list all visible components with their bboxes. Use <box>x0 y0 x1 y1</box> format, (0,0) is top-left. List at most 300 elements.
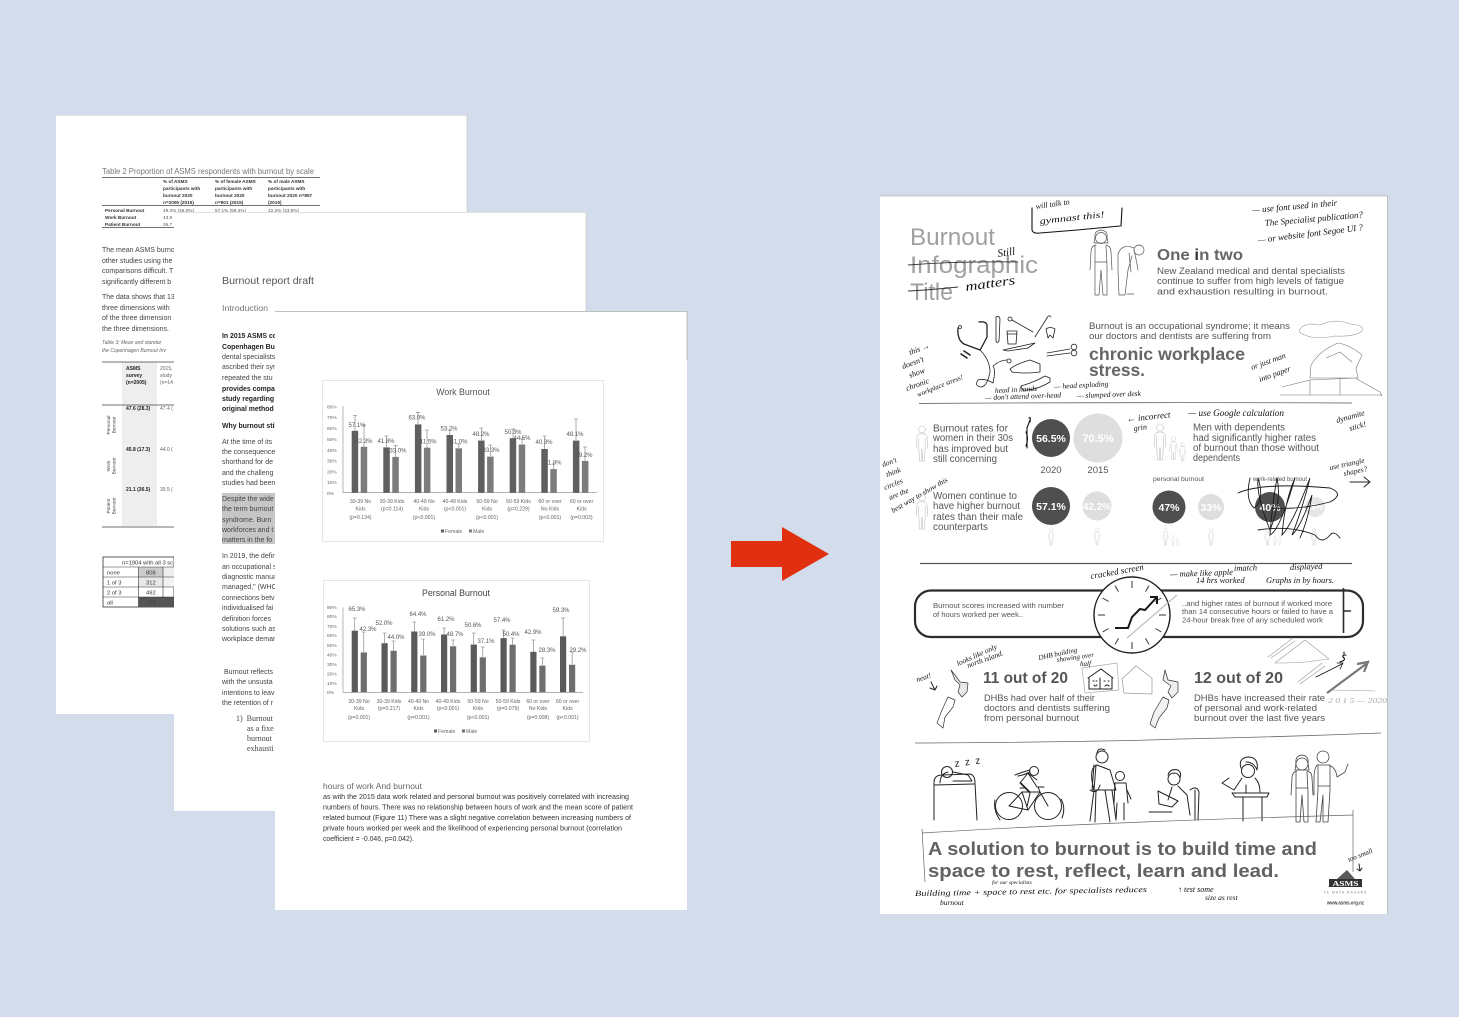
y axis: 80% <box>327 614 337 620</box>
value labels: 42.3% <box>355 439 373 445</box>
value labels: 41.0% <box>450 440 468 446</box>
icon: standing couple <box>1291 751 1348 822</box>
value labels: 59.3% <box>552 608 570 614</box>
legend <box>434 729 477 735</box>
category labels: Kids <box>413 706 424 712</box>
bar chart: personal burnout <box>324 580 590 742</box>
circle: 57.1 percent female: 57.1% <box>1036 501 1067 513</box>
table 2: burnout 2020 <box>163 193 193 198</box>
panel: draft report page 2 <box>174 212 586 811</box>
text: men with dependents <box>1193 422 1319 464</box>
value labels: 33.0% <box>389 448 407 454</box>
handwritten note: font suggestions: — or website font Segoe UI ? <box>1256 222 1364 245</box>
y axis: 0% <box>327 491 335 497</box>
value labels: 41.5% <box>419 440 437 446</box>
handwritten note: this doesn't show chronic workplace stress: workplace stress! <box>916 373 965 399</box>
value labels: 48.2% <box>472 432 490 438</box>
label: 2015 to 2020 sketch: 2 0 1 5 — 2020 <box>1328 697 1388 705</box>
logo: ASMS: TE MATA RAUARA <box>1323 890 1368 894</box>
handwritten note: font suggestions <box>1250 198 1364 245</box>
value labels: 39.0% <box>418 632 436 638</box>
body paragraphs: The data shows that 13 <box>102 294 175 301</box>
handwritten note: test some size as rest <box>1178 885 1239 902</box>
handwritten note: incorrect use Google calculation: — use Google calculation <box>1187 408 1284 418</box>
truncated body text: shorthand for de <box>222 459 273 466</box>
table 2: % of female ASMS <box>215 179 256 184</box>
handwritten note: or just man into paper <box>1250 351 1293 384</box>
category labels: Kids <box>482 506 492 512</box>
section: women versus men <box>916 487 1112 545</box>
icon: New Zealand map <box>937 670 968 728</box>
table 3: 47.4 ( <box>160 406 173 412</box>
text: DHBs have increased <box>1194 693 1325 724</box>
body paragraphs: significantly different b <box>102 279 171 286</box>
icon: person cycling <box>995 766 1064 820</box>
handwritten callout: will talk to: gymnast this! <box>1039 209 1105 226</box>
category labels: (p<0.001) <box>467 715 489 721</box>
truncated body text: Burnout reflects <box>224 669 274 676</box>
truncated body text: an occupational s <box>222 564 277 571</box>
icon: parent and child <box>1090 749 1131 822</box>
handwritten note: building time and space: burnout <box>940 898 965 907</box>
table 2 <box>102 166 320 228</box>
truncated body text: Despite the wide <box>222 496 274 503</box>
truncated body text: definition forces <box>222 616 272 623</box>
text: burnout rates for women: Burnout rates for <box>933 424 1009 434</box>
panel: infographic draft poster <box>880 196 1388 914</box>
value labels: 29.2% <box>569 648 587 654</box>
circle: 29 percent: 29% <box>1307 503 1323 512</box>
value labels <box>348 607 587 654</box>
category labels: Kids <box>576 506 587 512</box>
table 2: Work Burnout <box>105 215 137 220</box>
table 2: n=2005 (2015) <box>163 200 194 205</box>
icon: woman outline <box>916 426 928 461</box>
value labels: 53.2% <box>440 426 458 432</box>
circle: 70.5 percent 2015 <box>1074 414 1122 462</box>
table 2: 43.9 <box>163 215 173 220</box>
handwritten note: building time and space: Building time + space to rest etc. for specialists reduces <box>915 885 1147 898</box>
handwritten note: neat: neat! <box>915 670 933 684</box>
handwritten note: head in hands: — don't attend over-head <box>984 390 1062 402</box>
category labels: 30-39 Kids <box>377 699 402 705</box>
text: burnout rates for women: still concerning <box>933 454 997 465</box>
value labels: 52.0% <box>375 621 393 627</box>
icon: zzz: z z z <box>954 755 981 770</box>
value labels: 57.4% <box>493 618 511 624</box>
handwritten callout: will talk to: will talk to <box>1035 197 1070 211</box>
circle: 70.5 percent 2015: 70.5% <box>1082 433 1114 445</box>
circle: 47 percent: 47% <box>1158 502 1180 514</box>
value labels: 48.7% <box>446 632 464 638</box>
table 2: Table 2 Proportion of ASMS respondents with burnout by scale <box>102 166 314 176</box>
y axis: 0% <box>327 690 335 696</box>
handwritten note: this doesn't show chronic workplace stress: doesn't <box>901 354 926 371</box>
category labels: (p=0.003) <box>570 515 593 521</box>
text: women continue <box>933 491 1023 533</box>
category labels: 50-59 Kids <box>496 699 521 705</box>
small count table: 492 <box>146 590 156 596</box>
panel: draft report page 1 <box>56 115 467 714</box>
text: higher rates of burnout: ..and higher rates of burnout if worked more <box>1182 599 1332 608</box>
circle: 57.1 percent female <box>1032 487 1070 525</box>
category labels: (p=0.229) <box>507 506 530 512</box>
truncated body text: dental specialists <box>222 354 276 361</box>
small count table <box>103 557 174 607</box>
heading: hours of work and burnout: hours of work And burnout <box>323 781 423 791</box>
text: women continue: counterparts <box>933 522 988 533</box>
icon: father and children <box>1154 424 1186 461</box>
truncated body text: 1) Burnout <box>236 714 274 723</box>
category labels: No Kids <box>529 706 547 712</box>
value labels: 28.3% <box>538 648 556 654</box>
text: burnout scores increased: of hours worked per week.. <box>933 610 1023 619</box>
text: burnout rates for women: women in their 30s <box>932 433 1013 444</box>
label: personal burnout: personal burnout <box>1153 476 1204 483</box>
legend: Male <box>473 529 484 535</box>
circle: 40 percent <box>1255 492 1285 522</box>
category labels: 40-49 No <box>413 499 435 505</box>
text: DHBs have increased: burnout over the last five years <box>1194 713 1325 724</box>
circle: 29 percent <box>1305 497 1325 517</box>
label: 2015: 2015 <box>1087 465 1109 476</box>
text: burnout rates for women <box>932 424 1013 465</box>
banner outline <box>915 588 1363 637</box>
truncated body text: burnout <box>247 734 273 743</box>
table 3: study <box>160 373 172 379</box>
value labels: 65.3% <box>348 607 366 613</box>
value labels: 42.9% <box>524 630 542 636</box>
truncated body text: At the time of its <box>222 439 273 446</box>
truncated body text: matters in the fo <box>222 537 272 544</box>
handwritten note: make like apple: imatch <box>1234 562 1257 573</box>
text: one in two description: New Zealand medical and dental specialists <box>1157 266 1345 277</box>
y axis: 70% <box>327 624 337 630</box>
bar chart: work burnout <box>322 380 604 542</box>
icon: standing woman and bent man <box>1090 230 1144 295</box>
table 2: burnout 2020 <box>215 193 245 198</box>
table 2: (2015) <box>268 200 282 205</box>
category labels: (p=0.008) <box>527 715 549 721</box>
handwritten note: make like apple <box>1169 561 1334 585</box>
truncated body text: ascribed their sym <box>222 364 279 371</box>
truncated body text: and the challeng <box>222 470 273 477</box>
value labels <box>348 416 593 466</box>
y axis: 60% <box>327 426 337 432</box>
table 3: the Copenhagen Burnout Inv <box>102 348 166 354</box>
value labels: 57.1% <box>348 423 366 429</box>
handwritten note: DHB building showing over half <box>1037 646 1095 668</box>
text: men with dependents: had significantly higher rates <box>1193 433 1316 444</box>
category labels: Kids <box>419 506 429 512</box>
title: burnout infographic title struck through: Burnout <box>910 224 995 251</box>
icon: medical and dental tools with shoes <box>958 316 1077 390</box>
table 3: survey <box>126 373 142 379</box>
truncated body text: the term burnout <box>222 506 273 513</box>
truncated body text: workplace demar <box>221 636 276 643</box>
text: higher rates of burnout <box>1182 599 1334 624</box>
table 2: participants with <box>163 186 200 191</box>
table 3: Work <box>106 460 112 472</box>
table 3: (n=2005) <box>126 380 147 386</box>
legend <box>441 529 484 535</box>
truncated body text: study regarding <box>222 396 274 403</box>
handwritten note: make like apple: — make like apple <box>1169 567 1233 579</box>
table 3: Personal <box>106 416 112 434</box>
handwritten note: test some size as rest: size as rest <box>1205 893 1239 902</box>
y axis <box>327 404 597 497</box>
body paragraphs <box>102 247 175 333</box>
female bars <box>352 424 579 493</box>
error bars <box>353 618 574 665</box>
handwritten note: head in hands: head in hands <box>995 384 1037 395</box>
legend: Female <box>445 529 462 535</box>
handwritten note: test some size as rest: ↑ test some <box>1178 885 1214 894</box>
truncated body text: provides compar <box>222 386 278 393</box>
y axis <box>327 605 583 696</box>
icon: small man <box>1094 528 1100 545</box>
value labels: 50.4% <box>502 632 520 638</box>
category labels: (p<0.001) <box>476 515 498 521</box>
category labels: 50-59 No <box>476 499 498 505</box>
category labels: 50-59 Kids <box>506 499 531 505</box>
icon: small woman <box>1048 528 1054 545</box>
circle: 56.5 percent 2020 <box>1032 419 1070 457</box>
table 2: % of male ASMS <box>268 179 305 184</box>
category labels: (p=0.001) <box>348 715 370 721</box>
circle: 47 percent <box>1152 490 1186 524</box>
value labels: 44.0% <box>387 635 405 641</box>
sketch: DHB buildings <box>1082 663 1152 694</box>
small count table: 312 <box>146 580 156 586</box>
value labels: 50.6% <box>464 623 482 629</box>
text: women continue: have higher burnout <box>933 501 1020 512</box>
value labels: 29.2% <box>575 453 593 459</box>
handwritten note: dynamite stick <box>1335 408 1368 433</box>
text: one in two description <box>1157 266 1345 298</box>
small count table: 244 <box>146 600 156 606</box>
category labels: 40-49 No <box>408 699 429 705</box>
title: burnout infographic title struck through: Infographic <box>910 252 1038 279</box>
value labels: 64.4% <box>409 612 427 618</box>
text: one in two description: continue to suffer from high levels of fatigue <box>1157 276 1344 287</box>
table 2: participants with <box>215 186 252 191</box>
truncated body text: the consequence <box>222 449 275 456</box>
male bars <box>361 645 575 692</box>
handwritten note: this doesn't show chronic workplace stress <box>901 341 965 399</box>
section: 11 out of 20 <box>915 642 1152 728</box>
category labels: 60 or over <box>526 699 550 705</box>
y axis: 20% <box>327 672 337 678</box>
small count table: 2 of 3 <box>107 590 122 596</box>
category labels: 30-39 No <box>350 499 371 505</box>
handwritten note: don't think circles are the best way to show this <box>881 455 949 515</box>
handwritten note: or just man into paper: or just man <box>1250 351 1287 372</box>
text: one in two description: and exhaustion resulting in burnout. <box>1157 286 1328 298</box>
table 2: 42.2% (43.9%) <box>268 208 299 213</box>
category labels: Kids <box>562 706 573 712</box>
scribble over the work-related circles <box>1238 478 1340 540</box>
value labels: 63.0% <box>408 416 426 422</box>
truncated body text: Copenhagen Bur <box>222 344 278 351</box>
heading: a solution to burnout: A solution to burnout is to build time and <box>928 838 1317 859</box>
y axis: 60% <box>327 633 337 639</box>
table 2: 26.7 <box>163 222 173 227</box>
truncated body text: Why burnout stil <box>222 423 276 430</box>
icon: small family and single man <box>1163 528 1317 546</box>
heading: burnout report draft: Burnout report draft <box>222 275 314 287</box>
truncated body text: workforces and t <box>221 527 273 534</box>
handwritten note: dynamite stick: stick! <box>1348 419 1368 433</box>
y axis: 10% <box>327 480 337 486</box>
section: women in their 30s <box>916 414 1122 476</box>
arrow: red right arrow <box>731 527 829 581</box>
text: burnout scores increased: Burnout scores increased with number <box>933 601 1065 610</box>
table 2: 57.1% (59.4%) <box>215 208 246 213</box>
circle: 33 percent: 33% <box>1200 502 1222 514</box>
male bars <box>361 444 588 493</box>
handwritten note: building time and space <box>915 879 1147 907</box>
text: higher rates of burnout: than 14 consecutive hours or failed to have a <box>1182 607 1334 616</box>
handwritten note: cracked screen: cracked screen <box>1090 562 1145 581</box>
arrow: handwritten right arrow <box>1350 477 1370 487</box>
category labels: (p=0.217) <box>378 706 400 712</box>
handwritten note: matters: matters <box>964 272 1016 294</box>
handwritten note: neat <box>915 670 937 690</box>
y axis: 10% <box>327 681 337 687</box>
handwritten note: head in hands: — head exploding <box>1053 379 1109 391</box>
handwritten note: incorrect use Google calculation: ← incorrect <box>1126 409 1171 424</box>
handwritten note: use triangle shapes: use triangle <box>1329 456 1366 472</box>
body paragraphs: the three dimensions. <box>102 326 169 333</box>
circle: 33 percent <box>1198 494 1224 520</box>
table 2: % of ASMS <box>163 179 188 184</box>
handwritten note: make like apple: Graphs in by hours. <box>1266 575 1334 585</box>
table 3: Burnout <box>112 497 118 514</box>
truncated body text: repeated the stu <box>222 375 273 382</box>
text: women continue: rates than their male <box>933 512 1023 523</box>
category labels: (p<0.001) <box>539 515 561 521</box>
chart title: Personal Burnout <box>422 588 491 598</box>
y axis: 50% <box>327 437 337 443</box>
text: higher rates of burnout: 24-hour break free of any scheduled work <box>1182 616 1323 624</box>
table 2: n=801 (2015) <box>215 200 244 205</box>
stat: one in two: One in two <box>1157 247 1243 264</box>
value labels: 50.3% <box>504 430 522 436</box>
text: DHBs had over half: doctors and dentists suffering <box>984 703 1110 714</box>
table 3: 2015, <box>160 366 173 372</box>
table 3: Patient <box>106 498 112 513</box>
y axis: 90% <box>327 605 337 611</box>
category labels: 50-59 No <box>467 699 489 705</box>
handwritten note: head in hands: — slumped over desk <box>1076 389 1142 400</box>
handwritten note: font suggestions: — use font used in their <box>1250 198 1338 215</box>
truncated body text: with the unsusta <box>221 679 273 686</box>
body paragraphs: three dimensions with <box>102 305 170 312</box>
highlighted paragraph background <box>222 493 275 544</box>
value labels: 42.3% <box>359 627 377 633</box>
truncated body text: the retention of r <box>222 700 274 707</box>
section: hours worked banner <box>915 561 1363 653</box>
circle: 56.5 percent 2020: 56.5% <box>1036 433 1067 445</box>
handwritten note: DHB building showing over half: showing over <box>1056 651 1095 664</box>
heading: a solution to burnout <box>928 838 1317 881</box>
handwritten note: building time and space: for our specialists <box>992 879 1032 886</box>
handwritten note: use triangle shapes: shapes? <box>1343 464 1368 478</box>
value labels: 61.2% <box>437 617 455 623</box>
text: DHBs have increased: DHBs have increased their rate <box>1194 693 1325 704</box>
category labels: Kids <box>355 506 366 512</box>
value labels: 21.8% <box>544 460 562 466</box>
paragraph: hours of work: as with the 2015 data work related and personal burnout was positively correlated with increasing <box>323 794 629 801</box>
table 3: 21.1 (36.5) <box>126 487 151 493</box>
label: work-related burnout: work-related burnout <box>1252 476 1307 483</box>
table 3: 45.8 (17.3) <box>126 447 151 453</box>
handwritten note: font suggestions: The Specialist publication? <box>1264 209 1364 228</box>
table 3: 47.6 (28.3) <box>126 406 151 412</box>
text: DHBs have increased: of personal and work-related <box>1194 703 1317 714</box>
paragraph: hours of work: coefficient = -0.046, p=0.042). <box>323 836 414 843</box>
table 3: (n=14 <box>160 380 173 386</box>
handwritten callout: will talk to <box>1032 197 1122 233</box>
table 3: 44.0 ( <box>160 447 173 453</box>
y axis: 70% <box>327 415 337 421</box>
y axis: 20% <box>327 470 337 476</box>
handwritten note: make like apple: 14 hrs worked <box>1196 575 1245 585</box>
female bars <box>352 631 566 692</box>
category labels: (p=0.079) <box>497 706 519 712</box>
handwritten note: too small: too small <box>1347 847 1374 864</box>
text: burnout rates for women: has improved but <box>933 444 1008 455</box>
category labels: 60 or over <box>570 499 593 505</box>
value labels: 40.3% <box>535 440 553 446</box>
truncated body text: individualised fai <box>222 605 274 612</box>
handwritten note: this doesn't show chronic workplace stress: this → <box>908 341 931 357</box>
handwritten note: this doesn't show chronic workplace stress: chronic <box>905 376 931 393</box>
body paragraphs: The mean ASMS burno <box>102 247 175 254</box>
truncated body text: syndrome. Burn <box>222 517 272 524</box>
small count table: n=1904 with all 3 sc <box>122 560 173 566</box>
truncated body text: In 2019, the defin <box>222 553 276 560</box>
handwritten note: still: Still <box>997 246 1016 260</box>
y axis: 50% <box>327 643 337 649</box>
handwritten note: incorrect use Google calculation <box>1126 408 1284 433</box>
handwritten note: make like apple: displayed <box>1290 561 1323 572</box>
body paragraphs: comparisons difficult. T <box>102 268 174 275</box>
y axis: 40% <box>327 652 337 658</box>
category labels: (p=0.134) <box>349 515 372 521</box>
handwritten note: head in hands <box>984 379 1142 402</box>
truncated body text: managed," (WHC <box>222 584 277 591</box>
category labels <box>349 499 593 521</box>
category labels: (p=0.001) <box>407 715 430 721</box>
category labels <box>348 699 579 721</box>
handwritten note: looks like only north island: north island. <box>966 648 1005 670</box>
legend: Female <box>438 729 455 735</box>
truncated body text: intentions to leav <box>222 690 275 697</box>
text: men with dependents: Men with dependents <box>1193 422 1285 434</box>
category labels: 60 or over <box>538 499 562 505</box>
y axis: 80% <box>327 404 337 410</box>
handwritten note: this doesn't show chronic workplace stress: show <box>908 366 927 380</box>
heading: a solution to burnout: space to rest, reflect, learn and lead. <box>928 860 1279 881</box>
text: burnout is an occupational syndrome: our doctors and dentists are suffering from <box>1089 331 1271 342</box>
stat: 12 out of 20: 12 out of 20 <box>1194 670 1283 687</box>
value labels: 37.1% <box>477 639 495 645</box>
y axis: 30% <box>327 662 337 668</box>
category labels: Kids <box>473 706 483 712</box>
truncated body text: original method <box>222 406 274 413</box>
